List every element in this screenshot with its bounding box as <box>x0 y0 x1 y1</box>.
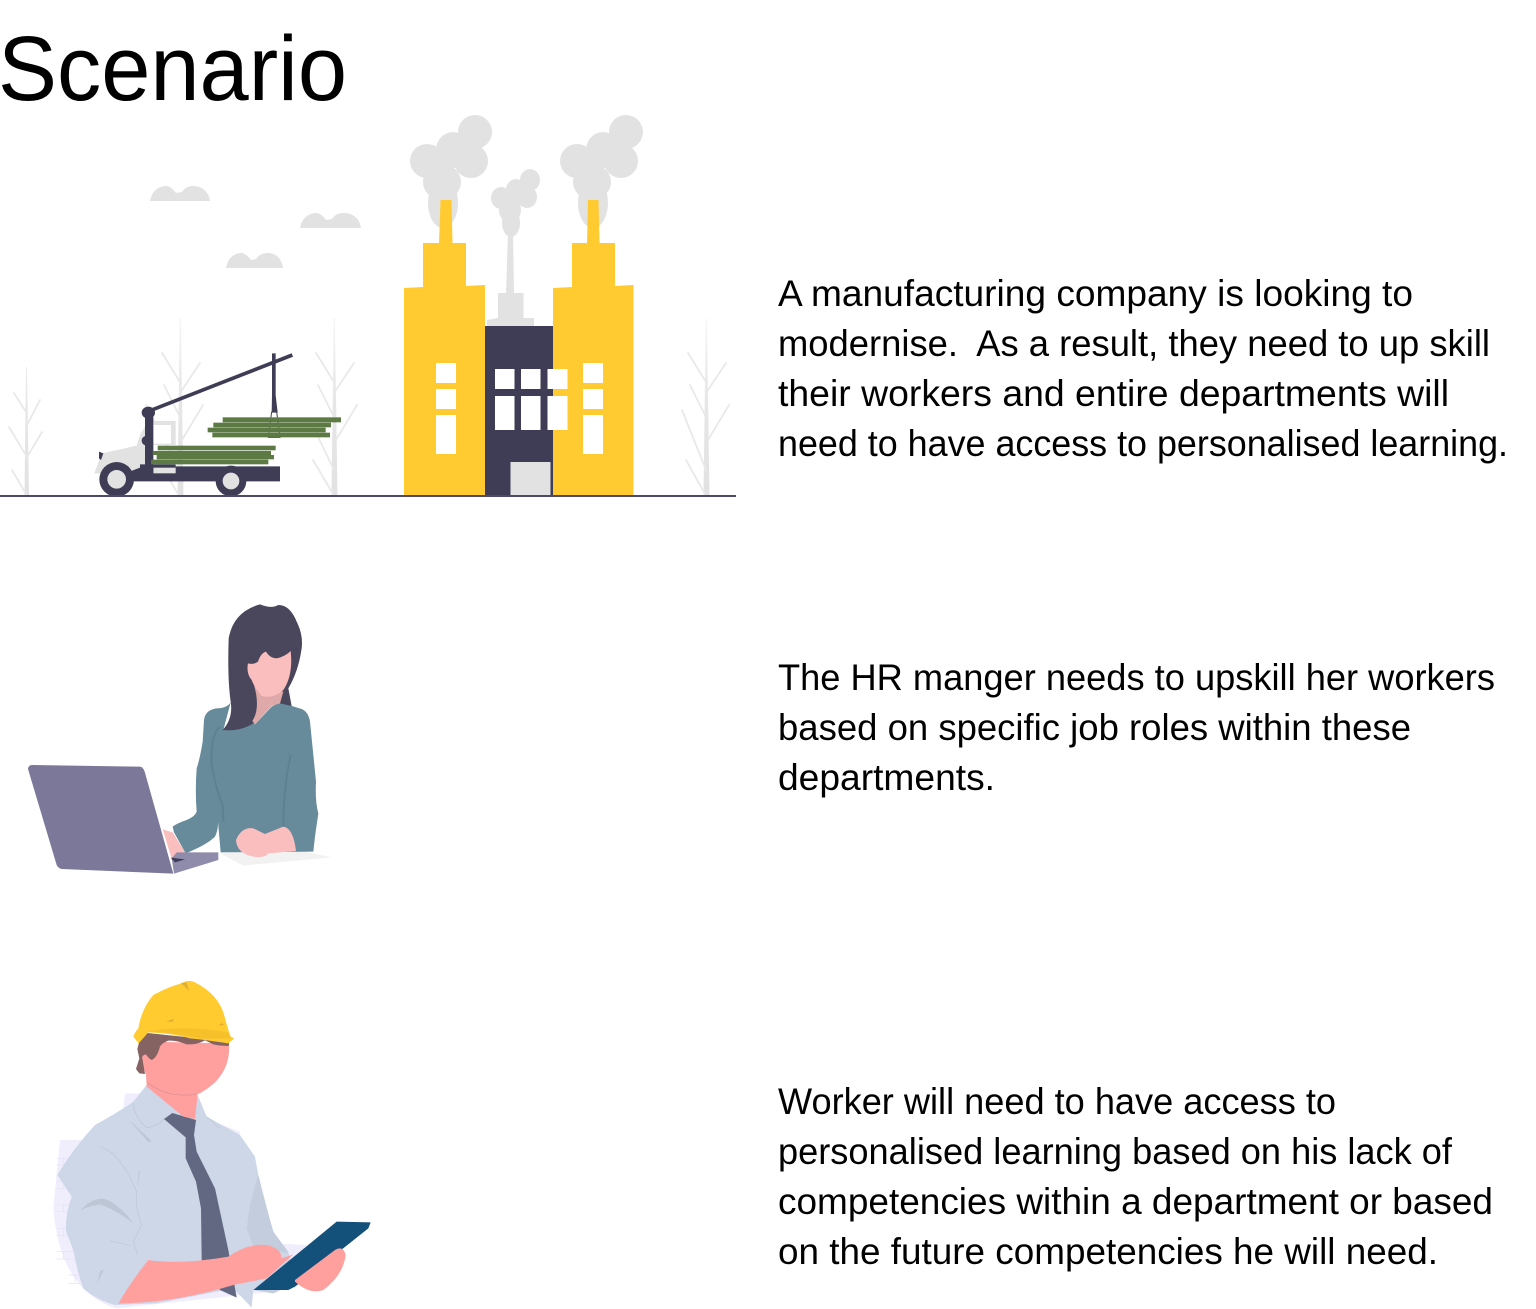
shirt <box>57 1085 297 1308</box>
text: manufacturing company: modernise. As a result, they need to up skill <box>778 323 1490 364</box>
head and neck <box>142 1042 229 1119</box>
trees <box>9 318 729 496</box>
laptop lid <box>28 765 173 874</box>
text: HR manager <box>778 657 1495 798</box>
illustration: worker with tablet <box>53 981 371 1308</box>
hair <box>136 1032 229 1074</box>
hair <box>223 604 302 730</box>
laptop base <box>172 852 218 874</box>
text: worker: Worker will need to have access to <box>778 1081 1336 1122</box>
illustration: HR manager at laptop <box>28 604 332 874</box>
factory left tower <box>404 200 485 496</box>
text: manufacturing company: A manufacturing company is looking to <box>778 273 1413 314</box>
illustration: factory scene <box>0 115 736 497</box>
ground line <box>0 495 736 497</box>
arm <box>118 1245 293 1303</box>
fingers <box>295 1248 346 1291</box>
neck <box>252 685 283 724</box>
crane truck <box>94 353 341 497</box>
hard hat <box>133 981 234 1043</box>
text: worker: competencies within a department or based <box>778 1181 1493 1222</box>
text: manufacturing company <box>778 273 1508 464</box>
text: HR manager: departments. <box>778 757 995 798</box>
sweater <box>173 702 318 853</box>
tie <box>164 1113 237 1298</box>
tablet <box>253 1222 371 1290</box>
text: worker: on the future competencies he will need. <box>778 1231 1438 1272</box>
paper <box>220 850 332 866</box>
text: manufacturing company: their workers and entire departments will <box>778 373 1449 414</box>
text: worker <box>778 1081 1493 1272</box>
forearms <box>236 827 296 857</box>
lavender background <box>53 1093 307 1308</box>
text: HR manager: The HR manger needs to upskill her workers <box>778 657 1495 698</box>
clouds <box>150 186 361 268</box>
factory central building <box>485 326 553 496</box>
text: HR manager: based on specific job roles within these <box>778 707 1411 748</box>
shirt shadow <box>247 1175 288 1293</box>
title: Scenario <box>0 18 347 120</box>
factory right tower <box>548 200 634 496</box>
hand <box>163 829 186 858</box>
face <box>247 651 291 697</box>
text: manufacturing company: need to have access to personalised learning. <box>778 423 1508 464</box>
smoke plumes <box>410 115 643 327</box>
text: worker: personalised learning based on his lack of <box>778 1131 1453 1172</box>
